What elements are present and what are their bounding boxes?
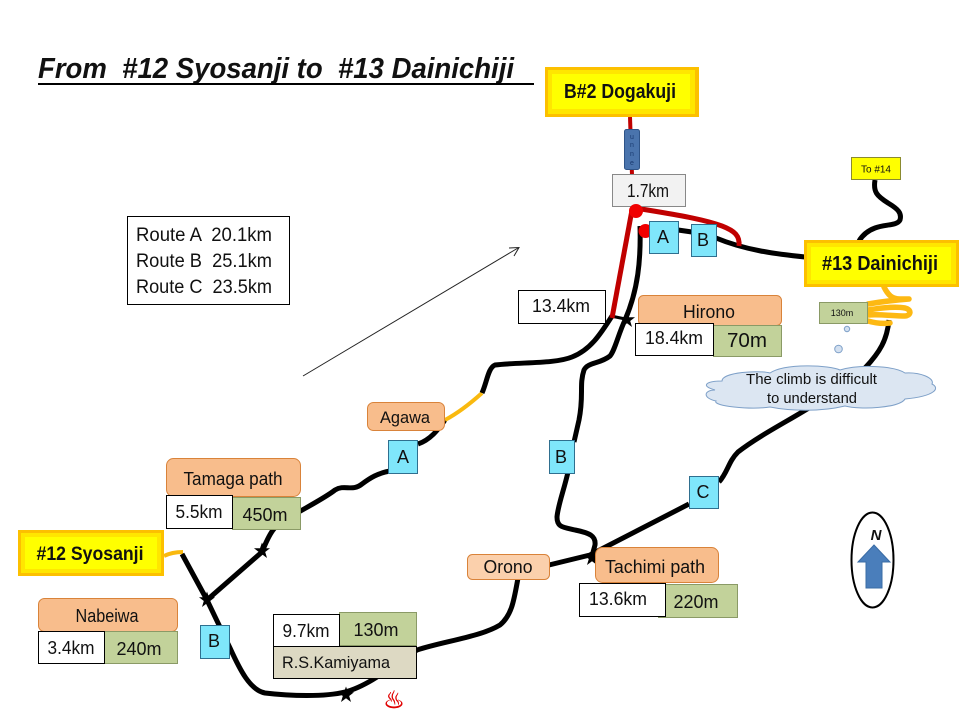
title: From #12 Syosanji to #13 Dainichiji	[38, 53, 515, 85]
route marker C	[690, 476, 718, 508]
star: Tamaga path	[254, 542, 270, 558]
bubble large	[835, 345, 842, 353]
road: route B upper	[557, 226, 640, 556]
road: route A upper	[482, 316, 612, 393]
place: Nabeiwa	[38, 598, 178, 664]
temple: 12 Syosanji	[18, 530, 164, 576]
distance: 1.7km	[612, 174, 686, 206]
waypoint: red dot upper	[629, 204, 643, 218]
callout cloud	[706, 366, 936, 410]
star: Tachimi	[584, 550, 600, 565]
route marker C: C	[696, 482, 710, 502]
place: Agawa	[368, 402, 444, 430]
road: orange segment on route A	[445, 393, 482, 420]
elevation: 130m small: 130m	[831, 308, 853, 318]
place: Orono	[468, 554, 550, 580]
callout cloud: The climb is difficult	[746, 371, 878, 388]
star: Kamiyama	[338, 686, 354, 702]
place: Hirono	[636, 296, 782, 356]
place: R.S. Kamiyama: R.S.Kamiyama	[282, 653, 391, 672]
place: Tamaga path	[166, 458, 300, 530]
tunnel: n	[630, 142, 634, 149]
place: Tachimi path: 220m	[674, 592, 718, 612]
star: Hirono	[619, 312, 635, 327]
road: B#2 spur red	[630, 117, 632, 175]
waypoint: red dot lower	[638, 224, 652, 238]
callout cloud: to understand	[767, 390, 857, 407]
sign: To 14: To #14	[861, 164, 891, 176]
temple: 12 Syosanji: #12 Syosanji	[36, 543, 144, 565]
road: junction connector	[611, 316, 630, 320]
tunnel: u	[630, 134, 634, 141]
elevation: 130m small	[820, 302, 868, 324]
place: Tachimi path	[580, 548, 738, 618]
route marker B middle	[550, 440, 574, 474]
temple: B#2 Dogakuji: B#2 Dogakuji	[564, 81, 676, 103]
route marker A lower: A	[397, 447, 409, 467]
temple: 13 Dainichiji: #13 Dainichiji	[822, 253, 938, 275]
road: route A	[207, 420, 445, 600]
north compass	[852, 512, 894, 608]
place: Hirono: 70m	[727, 330, 767, 352]
road: route B and C lower	[182, 320, 889, 696]
bubble small	[844, 326, 850, 332]
route legend: Route A 20.1km	[136, 225, 272, 246]
route marker B middle: B	[555, 447, 567, 467]
road: red branch	[636, 208, 739, 246]
distance: 1.7km: 1.7km	[627, 181, 669, 201]
road: to 14	[859, 180, 900, 241]
route marker B upper: B	[697, 230, 709, 250]
route marker A upper	[650, 222, 678, 254]
place: Nabeiwa: 240m	[116, 639, 162, 659]
place: Tachimi path: Tachimi path	[605, 557, 705, 577]
sign: To 14	[852, 158, 900, 180]
place: Tachimi path: 13.6km	[589, 589, 647, 609]
place: Hirono: Hirono	[683, 302, 735, 322]
place: Tamaga path: 5.5km	[176, 502, 222, 522]
tunnel	[624, 130, 640, 170]
place: Orono: Orono	[484, 557, 532, 577]
route marker A lower	[388, 440, 418, 474]
tunnel: n	[630, 151, 634, 158]
route marker A upper: A	[657, 227, 669, 247]
place: R.S. Kamiyama	[274, 612, 416, 678]
temple: B#2 Dogakuji	[545, 67, 699, 117]
place: R.S. Kamiyama: 130m	[354, 620, 398, 640]
route marker B upper	[692, 224, 716, 256]
direction arrow	[303, 248, 519, 376]
tunnel: e	[630, 160, 634, 167]
place: R.S. Kamiyama: 9.7km	[282, 621, 330, 641]
route legend	[128, 216, 290, 304]
place: Nabeiwa: Nabeiwa	[76, 606, 139, 626]
place: Tamaga path: 450m	[242, 505, 288, 525]
place: Tamaga path: Tamaga path	[184, 469, 282, 489]
road: start spur	[164, 552, 183, 556]
route legend: Route B 25.1km	[136, 251, 272, 272]
road: black to Dainichiji	[678, 230, 805, 257]
distance: 13.4km	[518, 290, 606, 324]
route marker B lower	[200, 626, 230, 658]
place: Nabeiwa: 3.4km	[48, 638, 94, 658]
temple: 13 Dainichiji	[804, 240, 959, 287]
star: junction Nabeiwa	[199, 592, 215, 607]
place: Hirono: 18.4km	[645, 328, 703, 348]
route marker B lower: B	[208, 631, 220, 651]
distance: 13.4km: 13.4km	[532, 296, 590, 316]
route legend: Route C 23.5km	[136, 277, 272, 298]
road: red path to temple 12	[612, 210, 632, 318]
icon: hot spring: ♨	[383, 686, 405, 714]
place: Agawa: Agawa	[380, 408, 431, 427]
road: climb yellow	[868, 287, 910, 323]
north compass: N	[871, 527, 883, 544]
